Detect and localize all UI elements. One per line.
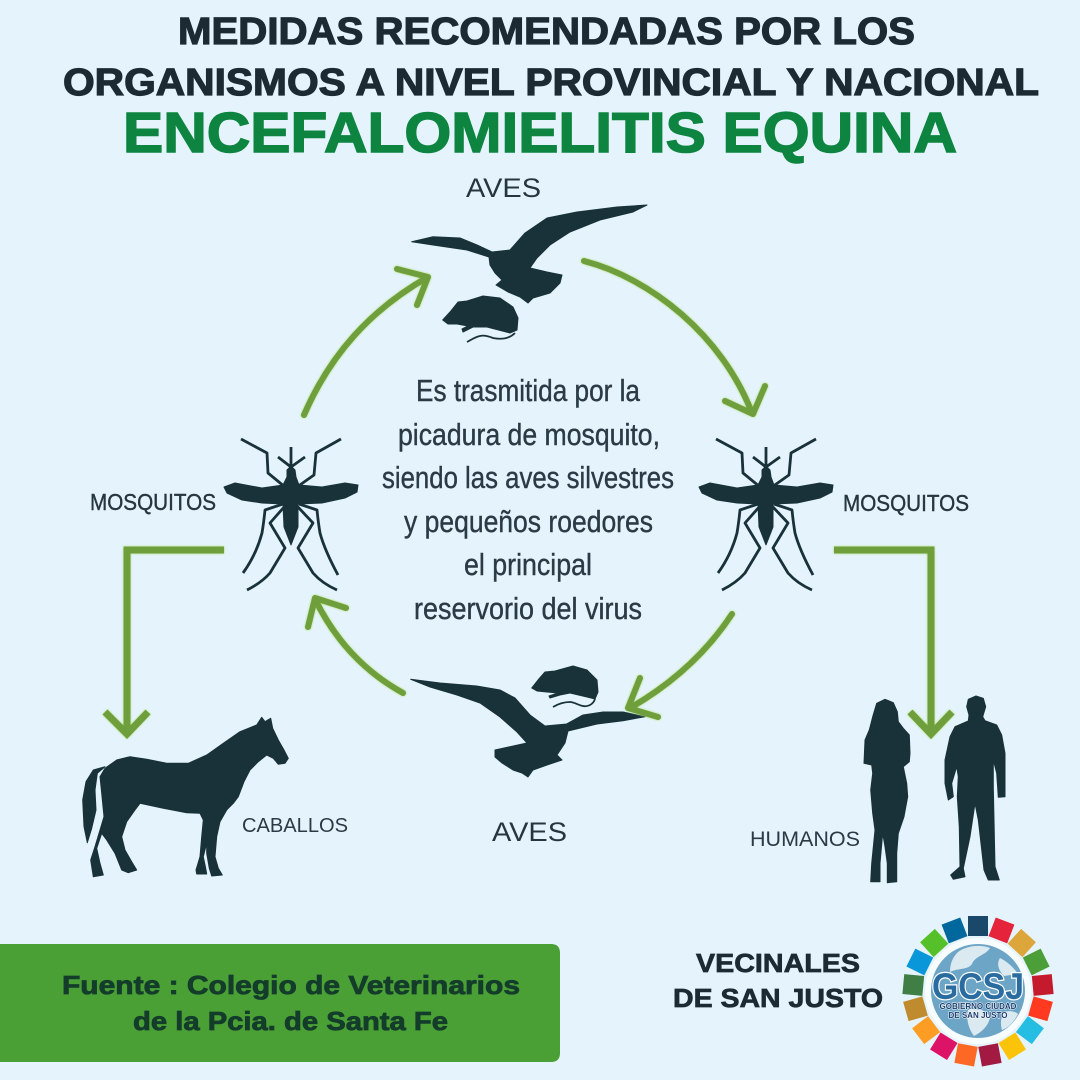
source text: de la Pcia. de Santa Fe: [133, 1006, 448, 1036]
logo lettering: GCSJ: [932, 966, 1024, 1007]
arrow: mosquito to humans: [834, 550, 952, 734]
text: vecinales: VECINALES: [696, 948, 860, 978]
title: measures heading: MEDIDAS RECOMENDADAS POR LOS: [178, 11, 915, 53]
central text: Es trasmitida por la: [416, 373, 641, 408]
logo: GCSJ SDG wheel: [902, 916, 1054, 1067]
arrow: birds to mosquito lower: [308, 598, 403, 693]
icon: bottom bird: [411, 679, 645, 777]
icon: bottom rat: [532, 666, 598, 707]
label: caballos: CABALLOS: [242, 815, 348, 837]
icon: left mosquito: [224, 439, 358, 590]
central text: [382, 373, 674, 626]
label: humanos: HUMANOS: [750, 828, 860, 851]
central text: siendo las aves silvestres: [382, 460, 674, 495]
panel: source box: [0, 944, 560, 1062]
source text: [62, 970, 520, 1036]
central text: el principal: [464, 547, 592, 582]
arrow: birds to mosquito: [584, 261, 765, 414]
globe: [931, 944, 1025, 1038]
logo lettering: GOBIERNO CIUDAD: [940, 1002, 1017, 1011]
SDG squares ring: [902, 916, 1054, 1067]
label: aves bottom: AVES: [492, 817, 567, 847]
icon: right mosquito: [699, 439, 833, 590]
title: measures heading: ORGANISMOS A NIVEL PROVINCIAL Y NACIONAL: [63, 62, 1039, 104]
label: mosquitos left: MOSQUITOS: [90, 489, 216, 515]
source text: Fuente : Colegio de Veterinarios: [62, 970, 520, 1000]
subtitle: disease name: ENCEFALOMIELITIS EQUINA: [123, 101, 957, 165]
icon: horse: [83, 717, 288, 877]
text: vecinales: DE SAN JUSTO: [673, 983, 883, 1013]
text: vecinales: [673, 948, 883, 1013]
icon: top bird: [412, 205, 647, 303]
label: aves top: AVES: [466, 173, 541, 203]
central text: picadura de mosquito,: [398, 417, 660, 452]
arrow: mosquito to birds lower: [628, 614, 732, 717]
icon: top rat: [443, 296, 518, 342]
central text: reservorio del virus: [414, 591, 642, 626]
label: mosquitos right: MOSQUITOS: [843, 490, 969, 516]
central text: y pequeños roedores: [404, 504, 653, 539]
arrow: mosquito to horse: [105, 550, 224, 734]
title: measures heading: [63, 11, 1039, 104]
arrow: mosquito to birds: [304, 269, 428, 415]
icon: man silhouette: [945, 696, 1005, 880]
icon: woman silhouette: [864, 699, 910, 883]
logo lettering: DE SAN JUSTO: [949, 1011, 1007, 1020]
